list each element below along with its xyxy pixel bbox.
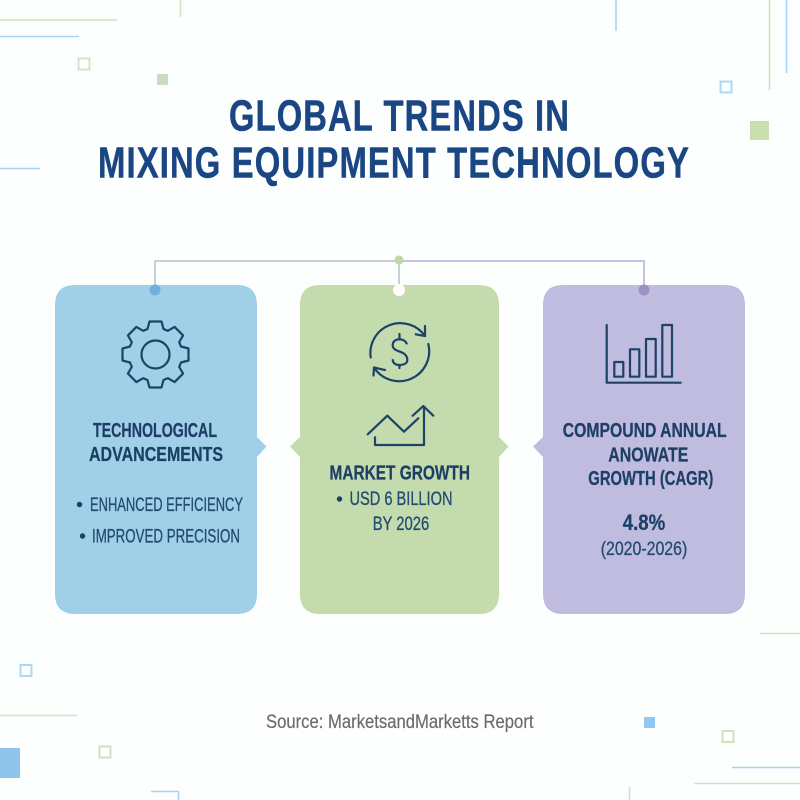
panel: market growth <box>290 256 508 614</box>
title <box>98 92 690 188</box>
card shape: green <box>290 285 508 614</box>
bullet: market size: USD 6 BILLION <box>350 489 452 510</box>
connector dot: blue <box>150 284 160 296</box>
heading: compound annual growth: COMPOUND ANNUAL <box>563 420 727 442</box>
bullet: market size <box>337 489 452 535</box>
card shape: purple <box>533 285 745 614</box>
panel: technological advancements <box>55 284 266 614</box>
bullet list: efficiency and precision: ENHANCED EFFICIENCY <box>90 495 243 516</box>
source note: Source: MarketsandMarketts Report <box>266 712 534 733</box>
heading: market growth: MARKET GROWTH <box>330 462 470 484</box>
stat: period: (2020-2026) <box>601 539 687 560</box>
heading: compound annual growth: ANOWATE <box>608 444 688 466</box>
icon: dollar cycle <box>370 323 429 381</box>
heading: compound annual growth <box>563 420 727 490</box>
stat: cagr value: 4.8% <box>623 510 665 535</box>
heading: technological advancements: ADVANCEMENTS <box>89 444 223 466</box>
heading: technological advancements <box>89 420 223 466</box>
bullet: market size: BY 2026 <box>373 514 429 535</box>
icon: bar chart <box>607 325 681 383</box>
connector dots: green and white <box>393 256 405 296</box>
heading: compound annual growth: GROWTH (CAGR) <box>588 468 713 490</box>
card shape: blue <box>55 285 266 614</box>
panel: compound annual growth <box>533 284 745 614</box>
connector lines <box>155 261 644 290</box>
connector dot: purple <box>638 284 650 296</box>
bullet list: efficiency and precision: IMPROVED PRECISION <box>92 526 240 548</box>
title: GLOBAL TRENDS IN <box>229 92 570 140</box>
bullet list: efficiency and precision <box>77 495 243 548</box>
icon: growth arrow chart <box>368 406 433 445</box>
icon: gear <box>122 322 188 388</box>
heading: technological advancements: TECHNOLOGICAL <box>93 420 217 442</box>
